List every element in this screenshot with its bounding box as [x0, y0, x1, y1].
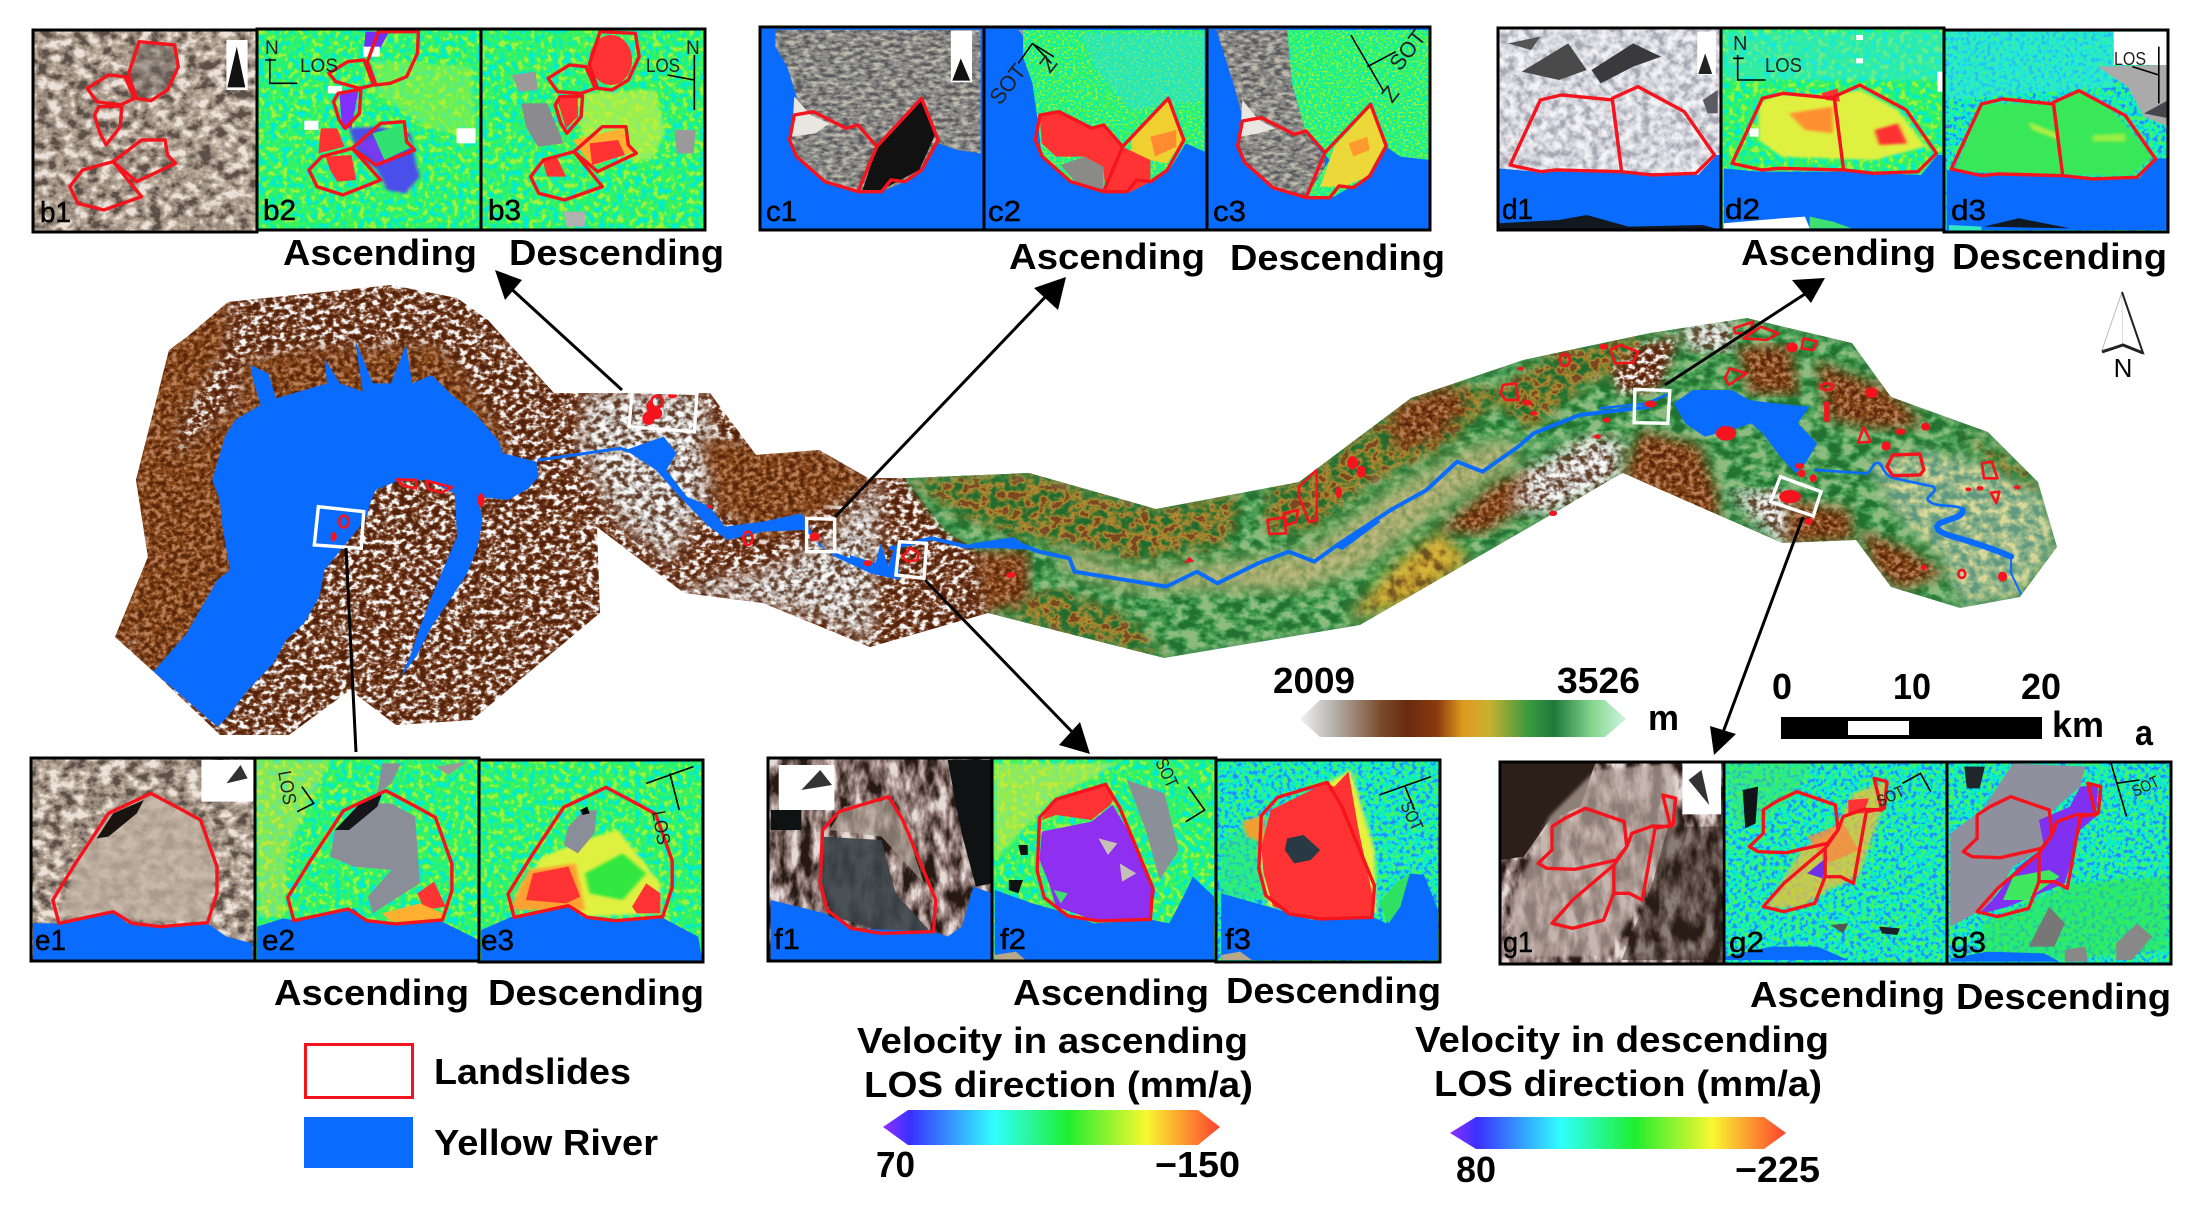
inset captions: Ascending / Descending: Ascending: [1741, 232, 1936, 273]
inset captions: Ascending / Descending: Descending: [1956, 976, 2171, 1017]
panel: f3 descending: f3: [1225, 924, 1251, 956]
scale bar: [1772, 666, 2104, 745]
inset captions: Ascending / Descending: Ascending: [1013, 972, 1209, 1013]
legend: Yellow River: Yellow River: [434, 1122, 658, 1163]
panel: c1 optical image: c1: [766, 196, 797, 228]
panel: g3 descending: [1947, 760, 2171, 964]
panel: e2 ascending: e2: [262, 925, 295, 957]
panel: g3 descending: g3: [1951, 927, 1986, 959]
panel: c3 descending: Z: [1376, 81, 1404, 107]
panel: g2 ascending: SOT: [1875, 783, 1907, 811]
panel: d3 descending: d3: [1951, 195, 1986, 227]
panel: c2 ascending: Z: [1034, 51, 1062, 77]
panel: g3 descending: SOT: [2130, 773, 2162, 801]
inset captions: Ascending / Descending: Descending: [1226, 970, 1441, 1011]
panel: f3 descending: [1216, 760, 1440, 962]
panel: c3 descending: [1207, 25, 1431, 230]
legend: landslides: Landslides: [434, 1051, 631, 1092]
legend: landslides: [306, 1044, 631, 1098]
water: reservoir and Yellow River: [154, 340, 2021, 727]
panel: e3 descending: e3: [481, 925, 514, 957]
panel: b2 ascending: N: [265, 38, 279, 59]
panel: e2 ascending: LOS: [273, 769, 300, 806]
arrow to inset f: [925, 580, 1090, 754]
colour bar: descending velocity: Velocity in descending: [1415, 1019, 1829, 1060]
panel: c2 ascending: SOT: [984, 59, 1031, 109]
arrow to inset c: [835, 277, 1066, 517]
panel: e1 optical image: e1: [35, 925, 66, 957]
scale bar: 0: [1772, 666, 1792, 707]
inset captions: Ascending / Descending: Descending: [509, 232, 724, 273]
arrow to inset d: [1665, 278, 1825, 385]
panel: c2 ascending: c2: [988, 196, 1021, 228]
panel: c3 descending: c3: [1213, 196, 1246, 228]
colour bar: ascending velocity: [857, 1020, 1253, 1185]
main DEM map of the Yellow River corridor: [90, 270, 2058, 750]
panel: b2 ascending: b2: [263, 195, 296, 227]
elevation legend: m: [1648, 697, 1679, 738]
colour bar: descending velocity: 80: [1456, 1149, 1496, 1190]
elevation legend: [1273, 660, 1679, 738]
colour bar: descending velocity: [1415, 1019, 1829, 1190]
inset captions: Ascending / Descending: Ascending: [1750, 974, 1945, 1015]
panel: c2 ascending: [984, 27, 1207, 230]
landslide outlines on the map: [331, 322, 2021, 582]
panel: f1 optical image: f1: [774, 924, 800, 956]
colour bar: descending velocity: −225: [1735, 1149, 1820, 1190]
panel: c1 optical image: [760, 27, 984, 230]
panel: d1 optical image: d1: [1502, 194, 1533, 226]
terrain: hypsometric shaded relief: [90, 270, 2058, 750]
inset captions: Ascending / Descending: Ascending: [1009, 236, 1205, 277]
panel: d3 descending: LOS: [2114, 49, 2146, 69]
panel: g2 ascending: g2: [1729, 927, 1764, 959]
colour bar: descending velocity: LOS direction (mm/a): [1434, 1063, 1822, 1104]
panel: c3 descending: SOT: [1384, 25, 1431, 75]
panel: f2 ascending: f2: [1000, 924, 1026, 956]
colour bar: ascending velocity: 70: [876, 1144, 915, 1185]
panel: b3 descending: LOS: [646, 56, 680, 77]
panel: d2 ascending: [1721, 28, 1944, 230]
panel: d2 ascending: d2: [1725, 194, 1760, 226]
white inset locator boxes: [314, 389, 1821, 578]
panel label a: a: [2135, 712, 2154, 753]
scale bar: 10: [1893, 666, 1931, 707]
inset captions: Ascending / Descending: Ascending: [283, 232, 477, 273]
panel: f3 descending: SOT: [1396, 798, 1427, 834]
inset captions: Ascending / Descending: Descending: [488, 972, 704, 1013]
panel: g2 ascending: [1724, 762, 1947, 964]
north arrow: N: [2114, 353, 2132, 383]
inset captions: Ascending / Descending: Ascending: [274, 972, 469, 1013]
elevation legend: 2009: [1273, 660, 1355, 701]
panel: d2 ascending: N: [1733, 33, 1747, 55]
colour bar: ascending velocity: −150: [1155, 1144, 1240, 1185]
panel: b1 optical image: [33, 30, 257, 232]
inset captions: Ascending / Descending: Descending: [1230, 237, 1445, 278]
panel: f2 ascending: SOT: [1151, 755, 1182, 791]
panel: e3 descending: [479, 760, 703, 963]
colour bar: ascending velocity: LOS direction (mm/a): [864, 1064, 1253, 1105]
panel: d2 ascending: LOS: [1765, 55, 1802, 77]
panel: b2 ascending: LOS: [300, 56, 338, 77]
panel: e3 descending: LOS: [647, 809, 674, 846]
arrow to inset b: [495, 270, 622, 390]
scale bar: 20: [2021, 666, 2061, 707]
panel: f2 ascending: [992, 755, 1216, 961]
panel: d1 optical image: [1498, 28, 1721, 230]
panel: g1 optical image: g1: [1503, 927, 1533, 959]
panel: g1 optical image: [1500, 762, 1724, 964]
north arrow: [2102, 292, 2143, 383]
panel: f1 optical image: [768, 758, 992, 961]
panel: e1 optical image: [31, 758, 255, 961]
panel: b1 optical image: b1: [40, 197, 71, 229]
inset captions: Ascending / Descending: Descending: [1952, 236, 2167, 277]
panel: b2 ascending: [257, 29, 481, 230]
inset captions: Ascending / Descending: [274, 232, 2171, 1017]
panel: d3 descending: [1944, 30, 2169, 232]
arrow to inset g: [1710, 517, 1803, 755]
colour bar: ascending velocity: Velocity in ascending: [857, 1020, 1248, 1061]
panel: b3 descending: N: [686, 38, 700, 59]
panel: e2 ascending: [255, 758, 479, 961]
legend: Yellow River: [304, 1117, 658, 1168]
panel: b3 descending: b3: [488, 195, 521, 227]
leader line to inset e: [346, 548, 356, 752]
panel: b3 descending: [481, 29, 705, 230]
elevation legend: 3526: [1557, 660, 1640, 701]
scale bar: km: [2052, 704, 2104, 745]
